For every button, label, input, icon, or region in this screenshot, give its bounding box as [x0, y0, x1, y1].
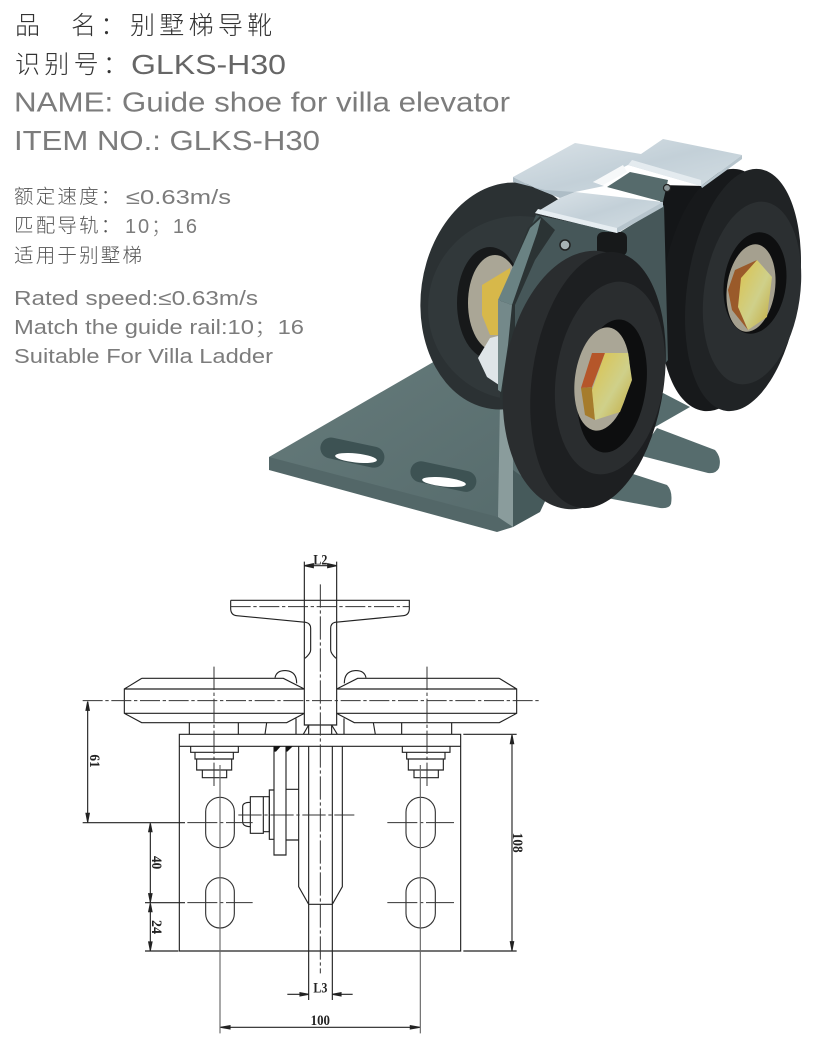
roller hubs: [189, 718, 452, 734]
heading: product name and item number: 品: [15, 12, 44, 40]
dimension 100: 100: [311, 1013, 330, 1029]
product photo: guide shoe: [269, 139, 814, 532]
right roller: [337, 671, 517, 723]
dimension 100: [221, 1013, 420, 1029]
guide rail profile: [231, 600, 409, 658]
base plate: [269, 357, 548, 532]
center lines: [83, 584, 541, 973]
left roller: [124, 671, 304, 723]
dimension L3: [287, 981, 353, 997]
text block: specifications: Suitable For Villa Ladder: [14, 346, 273, 368]
dimension 24: [145, 903, 178, 951]
text block: specifications: 适用于别墅梯: [14, 245, 144, 267]
technical drawing: [83, 552, 541, 1033]
heading: product name and item number: ITEM NO.: GLKS-H30: [14, 125, 320, 156]
slot axes: [220, 765, 420, 1033]
dimension 24: 24: [148, 920, 164, 935]
bracket body: [179, 734, 461, 951]
right nut: [402, 746, 450, 778]
text block: specifications: 10；16: [125, 216, 197, 238]
text block: specifications: 匹配导轨：: [14, 215, 123, 237]
back-left wheel: [406, 171, 612, 421]
heading: product name and item number: 识别号：: [15, 51, 132, 79]
bracket tabs: [607, 393, 720, 508]
front wheel: [487, 240, 681, 520]
dimension 40: 40: [148, 856, 164, 869]
text block: specifications: ≤0.63m/s: [126, 187, 231, 209]
dimension L2: L2: [313, 552, 327, 568]
heading: product name and item number: 名：: [71, 12, 130, 40]
text block: specifications: 额定速度：: [14, 186, 123, 208]
zinc top plates: [513, 139, 742, 233]
white nut: [478, 335, 502, 387]
back-right wheel: [646, 161, 814, 419]
dimension 61: 61: [86, 754, 102, 768]
slots: [206, 797, 435, 928]
heading: product name and item number: GLKS-H30: [131, 49, 286, 80]
heading: product name and item number: [14, 12, 510, 156]
text block: specifications: [14, 186, 304, 368]
left nut: [191, 746, 238, 778]
dimension 108: [463, 734, 525, 951]
heading: product name and item number: 别墅梯导靴: [130, 12, 277, 40]
central shaft: [269, 746, 342, 1000]
dimension 40: [145, 823, 185, 903]
side bolt: [243, 797, 269, 833]
text block: specifications: Rated speed:≤0.63m/s: [14, 288, 258, 310]
dimension 108: 108: [509, 833, 525, 853]
bracket: [498, 172, 670, 420]
dimension L2: [304, 552, 337, 725]
heading: product name and item number: NAME: Guide shoe for villa elevator: [14, 86, 510, 118]
text block: specifications: Match the guide rail:10；16: [14, 317, 304, 339]
dimension 61: [83, 702, 185, 823]
dimension L3: L3: [313, 981, 327, 997]
